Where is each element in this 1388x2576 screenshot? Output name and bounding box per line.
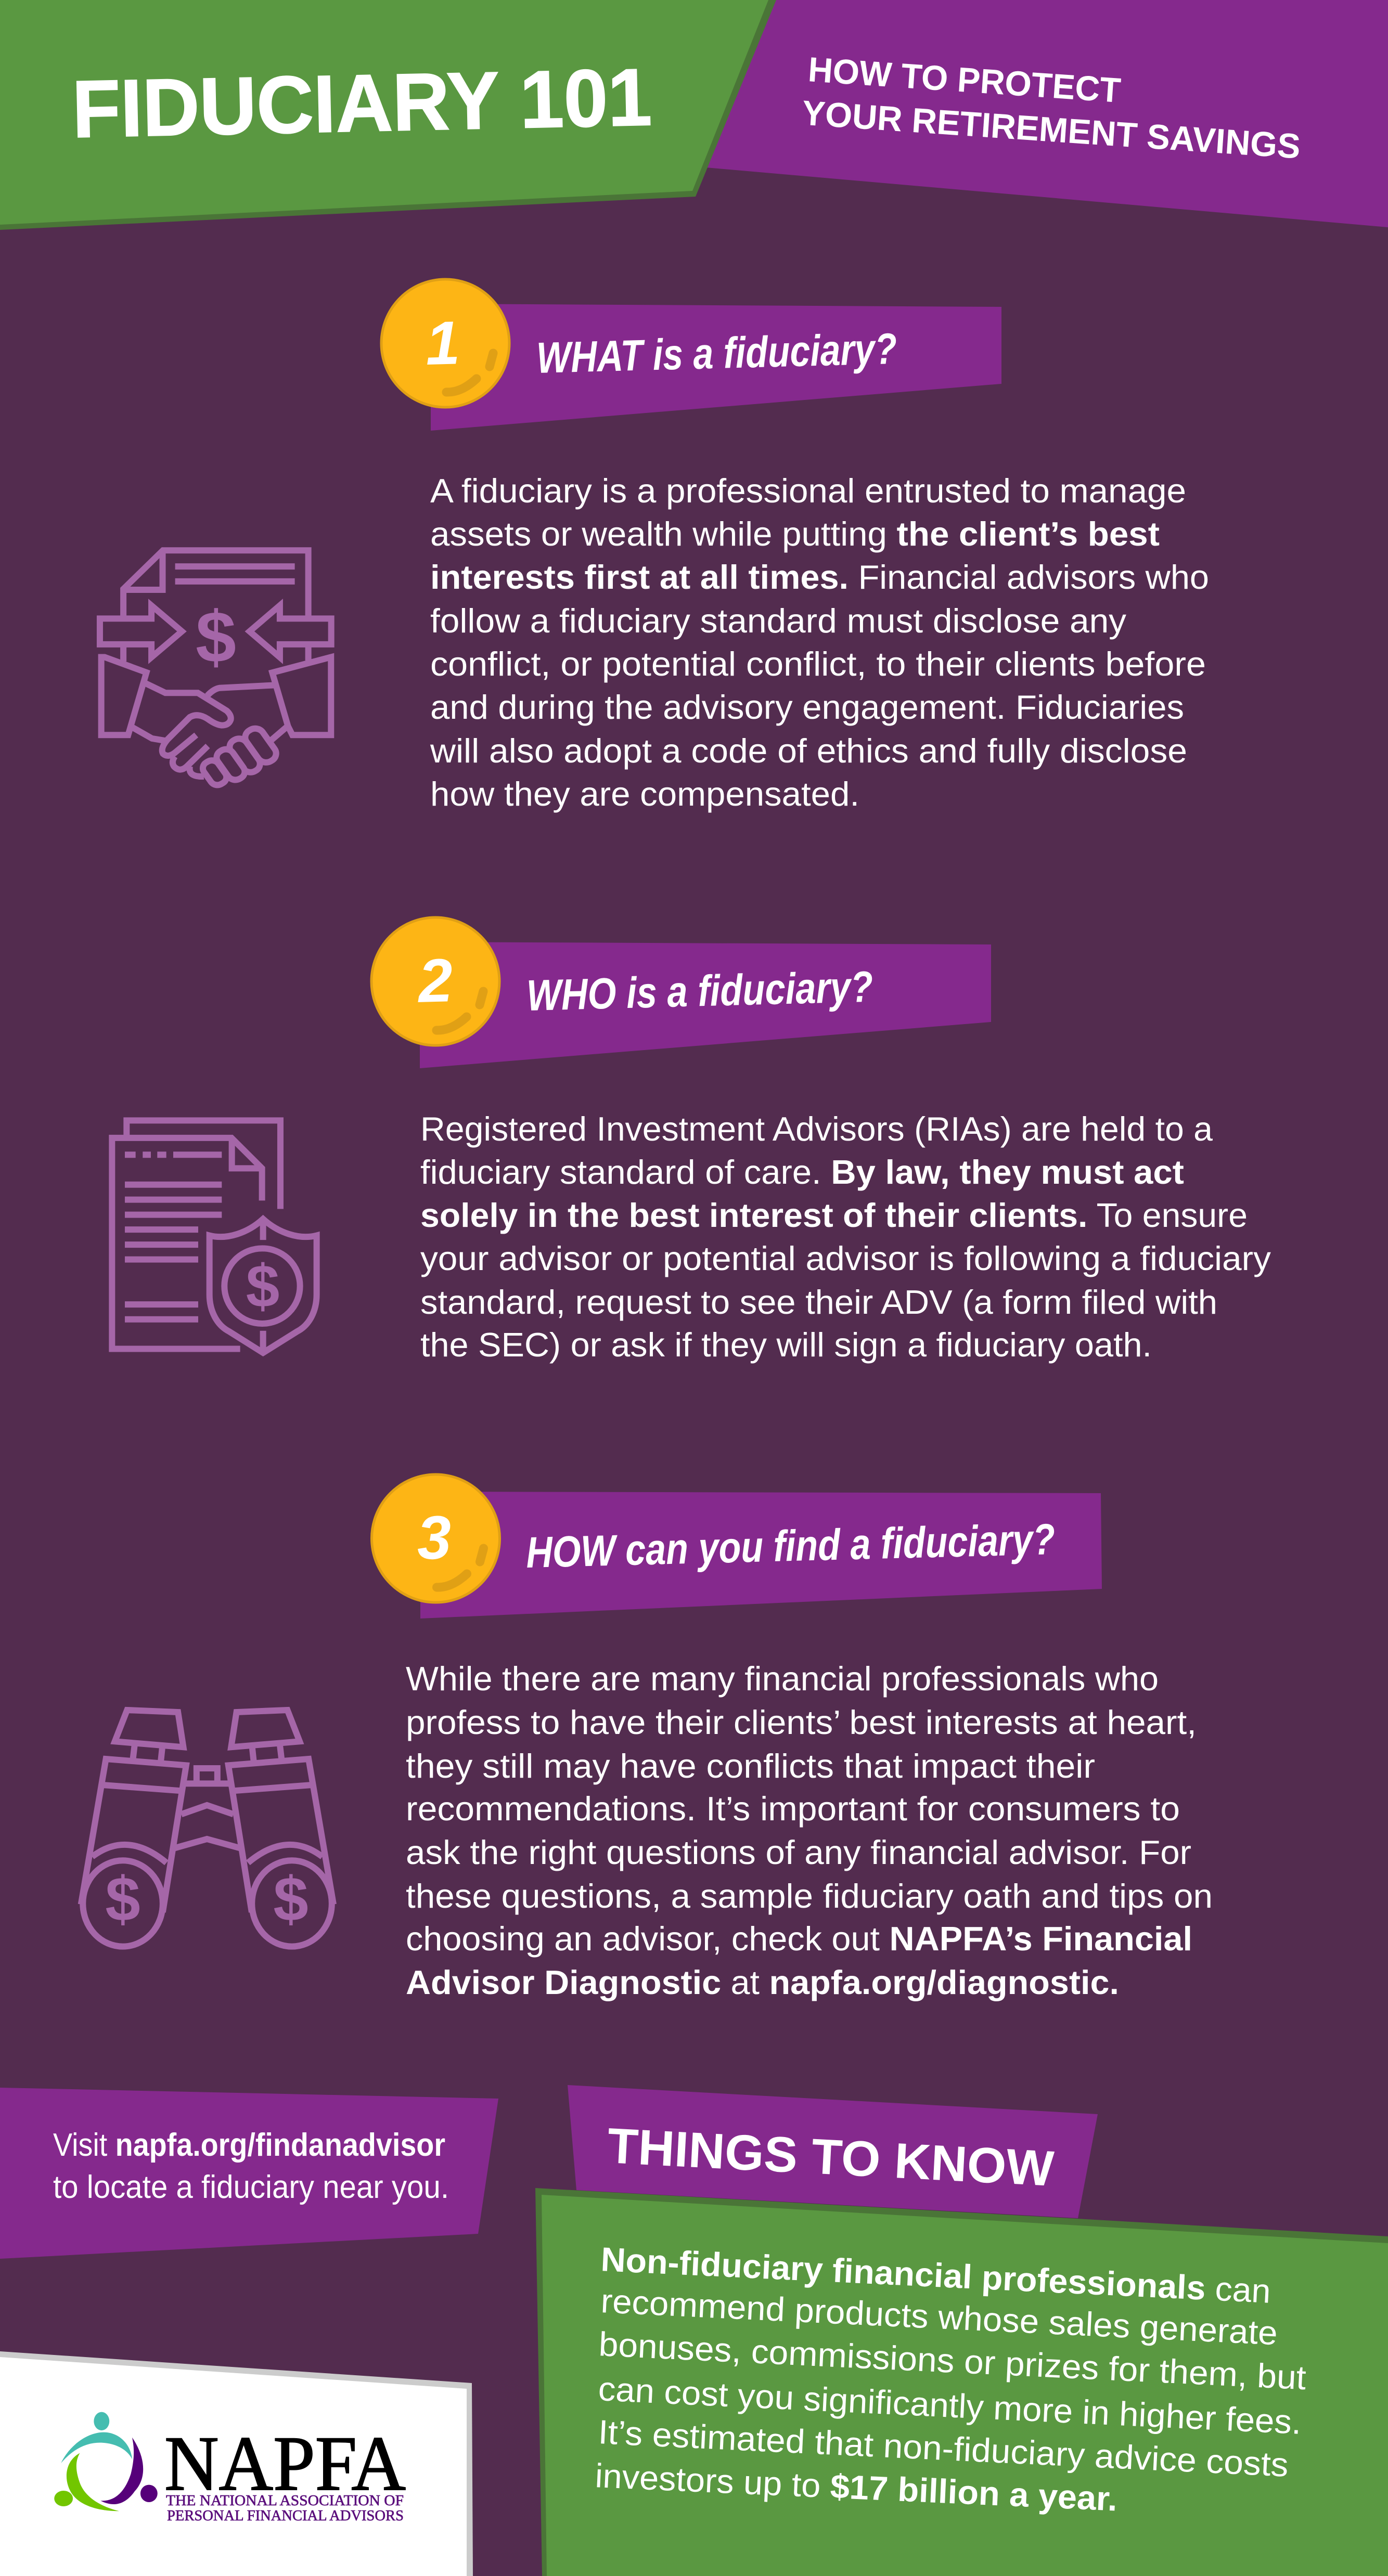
panel: things to know body (535, 2188, 1388, 2576)
title: FIDUCIARY 101 (71, 52, 652, 155)
text block: what is a fiduciary: how they are compensated. (430, 775, 859, 813)
body text: bonuses, commissions or prizes for them, but (598, 2325, 1307, 2397)
callout text: to locate a fiduciary near you. (53, 2169, 449, 2205)
body text: investors up to $17 billion a year. (594, 2456, 1119, 2518)
panel: logo card (0, 2351, 473, 2576)
panel: things to know heading (568, 2085, 1098, 2218)
logo: NAPFA wordmark: THE NATIONAL ASSOCIATION OF (166, 2492, 404, 2509)
text block: who is a fiduciary: your advisor or potential advisor is following a fiduciary (420, 1239, 1271, 1277)
body text (594, 2240, 1307, 2518)
badge: number 2 (371, 917, 499, 1045)
text block: how to find a fiduciary: profess to have their clients’ best interests at heart, (406, 1703, 1197, 1741)
text block: who is a fiduciary: Registered Investment Advisors (RIAs) are held to a (420, 1110, 1213, 1148)
logo: NAPFA wordmark: PERSONAL FINANCIAL ADVISORS (167, 2507, 404, 2524)
text block: who is a fiduciary: standard, request to see their ADV (a form filed with (420, 1283, 1217, 1321)
text block: who is a fiduciary: fiduciary standard of care. By law, they must act (420, 1153, 1184, 1191)
callout text (53, 2127, 449, 2205)
text block: what is a fiduciary: conflict, or potential conflict, to their clients before (430, 645, 1206, 683)
icon: contract and handshake: $ (196, 596, 236, 678)
text block: how to find a fiduciary (406, 1660, 1213, 2001)
heading text: HOW can you find a fiduciary? (525, 1514, 1056, 1577)
panel: title banner (0, 0, 776, 230)
text block: who is a fiduciary (420, 1110, 1271, 1364)
panel: subtitle banner (676, 0, 1388, 227)
badge: number 2: 2 (416, 946, 454, 1016)
text block: what is a fiduciary: assets or wealth while putting the client’s best (430, 515, 1160, 553)
text block: how to find a fiduciary: choosing an advisor, check out NAPFA’s Financial (406, 1920, 1192, 1958)
section 1 heading (381, 279, 1001, 431)
badge: number 3: 3 (416, 1503, 452, 1573)
text block: how to find a fiduciary: these questions, a sample fiduciary oath and tips on (406, 1877, 1213, 1915)
icon: binoculars with dollar coins: $ (273, 1863, 309, 1934)
icon: documents and shield: $ (246, 1252, 279, 1320)
things to know title: THINGS TO KNOW (606, 2118, 1056, 2197)
text block: who is a fiduciary: solely in the best interest of their clients. To ensure (420, 1196, 1248, 1234)
icon: documents and shield (112, 1120, 317, 1353)
callout text: Visit napfa.org/findanadvisor (53, 2127, 445, 2163)
icon: contract and handshake (100, 550, 331, 787)
icon: binoculars with dollar coins (81, 1710, 333, 1947)
badge: number 1: 1 (425, 308, 461, 378)
text block: what is a fiduciary: interests first at all times. Financial advisors who (430, 558, 1209, 596)
text block: how to find a fiduciary: While there are many financial professionals who (406, 1660, 1159, 1698)
text block: how to find a fiduciary: recommendations. It’s important for consumers to (406, 1790, 1180, 1828)
text block: what is a fiduciary (430, 472, 1209, 813)
body text: can cost you significantly more in higher fees. (597, 2370, 1302, 2441)
badge: number 3 (371, 1474, 499, 1602)
subtitle: YOUR RETIREMENT SAVINGS (801, 94, 1302, 166)
badge: number 1 (381, 279, 509, 407)
body text: Non-fiduciary financial professionals can (600, 2240, 1271, 2310)
section 2 heading (371, 917, 991, 1068)
text block: how to find a fiduciary: they still may have conflicts that impact their (406, 1747, 1095, 1785)
body text: It’s estimated that non-fiduciary advice costs (597, 2413, 1289, 2484)
logo: NAPFA wordmark: NAPFA (164, 2420, 406, 2507)
text block: what is a fiduciary: and during the advisory engagement. Fiduciaries (430, 688, 1184, 726)
body text: recommend products whose sales generate (600, 2282, 1278, 2352)
section 3 heading (371, 1474, 1102, 1619)
logo: NAPFA mark (54, 2412, 158, 2511)
panel: visit callout (0, 2088, 498, 2259)
heading text: WHAT is a fiduciary? (536, 324, 897, 382)
text block: who is a fiduciary: the SEC) or ask if they will sign a fiduciary oath. (420, 1326, 1152, 1364)
text block: how to find a fiduciary: ask the right questions of any financial advisor. For (406, 1833, 1191, 1871)
text block: how to find a fiduciary: Advisor Diagnostic at napfa.org/diagnostic. (406, 1963, 1119, 2001)
icon: binoculars with dollar coins: $ (105, 1863, 140, 1934)
subtitle: HOW TO PROTECT (807, 50, 1122, 110)
text block: what is a fiduciary: follow a fiduciary standard must disclose any (430, 602, 1127, 640)
text block: what is a fiduciary: A fiduciary is a professional entrusted to manage (430, 472, 1186, 510)
text block: what is a fiduciary: will also adopt a code of ethics and fully disclose (430, 732, 1187, 770)
heading text: WHO is a fiduciary? (526, 962, 873, 1020)
subtitle (801, 50, 1305, 166)
